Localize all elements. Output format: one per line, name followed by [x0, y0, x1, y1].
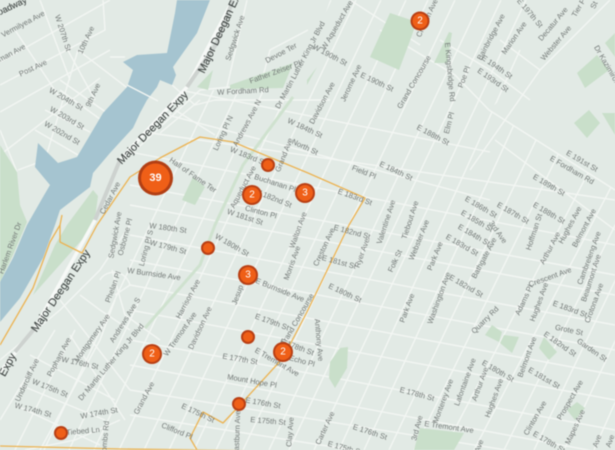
street labels: Sedgwick Ave: [223, 14, 247, 62]
street labels: W Burnside Ave: [127, 266, 181, 282]
street labels: Beaumont Ave: [579, 253, 603, 303]
marker: cluster 3 Burnside: [238, 265, 258, 285]
street labels: Arthur Ave: [538, 230, 562, 266]
street labels: E 177th St: [222, 351, 259, 367]
street labels: Carter Ave: [313, 410, 337, 446]
marker: cluster 3 Burnside: 3: [245, 270, 251, 280]
street labels: Dr Martin Luther King Jr Blvd: [273, 20, 327, 110]
marker: cluster 3 Walton: [295, 183, 315, 203]
street labels: Grote St: [554, 323, 585, 338]
street labels: Jerome Ave: [338, 63, 364, 103]
marker: cluster 3 Walton: 3: [302, 188, 308, 198]
street labels: E 176th St: [245, 395, 282, 411]
street labels: 3rd Ave: [409, 414, 425, 442]
street labels: Davidson Ave: [307, 80, 337, 126]
street labels: W 182nd St: [253, 186, 294, 210]
street labels: Sedgwick Ave: [106, 211, 124, 259]
street labels: E Kingsbridge Rd: [443, 42, 457, 102]
street labels: North St: [290, 137, 320, 157]
marker: single E 179th St: [241, 330, 255, 344]
street labels: E 185th St: [459, 208, 495, 234]
street labels: Washington Ave: [425, 271, 453, 325]
street labels: Marion Ave: [499, 20, 529, 56]
street labels: E 175th St: [180, 401, 217, 425]
street labels: Major Deegan Expy: [115, 89, 191, 167]
street labels: Harrison Ave: [174, 278, 202, 320]
street labels: W 174th St: [80, 405, 119, 421]
marker: single W 180th St: [201, 241, 215, 255]
street labels: Jesup Ave: [230, 270, 250, 306]
street labels: E 194th St: [480, 53, 515, 81]
street labels: Hughes Ave: [556, 205, 584, 245]
street labels: Anthony Ave: [313, 318, 325, 362]
street labels: E 191st St: [565, 148, 600, 174]
street labels: E 179th St: [254, 312, 291, 333]
street labels: Andrews Ave N: [231, 98, 263, 148]
street labels: Ryer Ave: [353, 237, 371, 269]
marker: cluster 2 top: [410, 12, 430, 30]
street labels: Buchanan Pl: [253, 172, 297, 194]
street labels: Poe Pl: [456, 65, 472, 89]
street labels: Park Ave: [398, 292, 416, 324]
street labels: Field Pl: [351, 163, 378, 181]
street labels: E Tremont Ave: [424, 419, 474, 435]
street labels: W 202nd St: [43, 119, 82, 147]
street labels: Valentine Ave: [375, 199, 397, 245]
street labels: E 186th St: [463, 194, 499, 220]
street labels: Phelan Pl: [103, 270, 123, 304]
street labels: W 204th St: [47, 86, 85, 113]
street labels: E 176th St: [352, 422, 389, 442]
street labels: E 183rd St: [444, 232, 481, 258]
street labels: Tiebed Ln: [66, 425, 100, 437]
street labels: W 180th St: [149, 221, 188, 235]
street labels: Hoffman St: [524, 212, 544, 251]
street labels: E 183rd St: [552, 299, 589, 320]
street labels: W 176th St: [61, 355, 100, 371]
street labels: Loring Pl S: [137, 229, 155, 267]
marker: cluster 2 Aqueduct: 2: [249, 190, 255, 200]
street labels: E 188th St: [531, 200, 567, 226]
street labels: Mount Hope Pl: [226, 372, 278, 390]
street labels: E 180th St: [327, 281, 364, 305]
street labels: W 181st St: [226, 207, 265, 227]
street labels: Webster Ave: [539, 24, 573, 62]
street labels: Clay Ave: [284, 417, 296, 447]
street labels: E 182nd St: [333, 223, 372, 241]
street labels: Prospect Ave: [555, 378, 585, 422]
street labels: E 178th St: [279, 337, 316, 358]
street labels: W 179th St: [149, 238, 188, 256]
street labels: W Tremont Ave: [161, 310, 199, 358]
marker: single E 176th St: [232, 397, 246, 411]
street labels: Quarry Rd: [469, 304, 501, 336]
street labels: E 184th St: [378, 159, 415, 183]
street labels: Clinton Pl: [244, 203, 278, 221]
street labels: E 181st St: [321, 253, 358, 271]
river: [0, 0, 210, 322]
street labels: Lafontaine Ave: [452, 357, 478, 407]
street labels: Father Zeiser Pl: [248, 58, 302, 85]
street labels: Elm Pl: [442, 111, 456, 135]
marker: cluster 39: [138, 160, 173, 196]
street labels: Belmont Ave: [570, 207, 598, 249]
street labels: Aqueduct Ave: [228, 164, 258, 210]
street labels: Webster Ave: [407, 218, 431, 262]
street labels: Major Deegan Expy: [29, 247, 93, 334]
expressway: Major Deegan: [0, 0, 233, 372]
street labels: Decatur Ave: [536, 5, 570, 43]
street labels: Adams Pl: [513, 283, 535, 317]
street labels: Grand Ave: [132, 380, 156, 416]
marker: single at Grand Ave: [261, 158, 275, 172]
street labels: E 189th St: [531, 172, 567, 198]
street labels: W 207th St: [53, 14, 73, 53]
marker: cluster 2 Grand Concourse: 2: [280, 346, 286, 358]
marker: cluster 2 Grand Concourse: [273, 342, 293, 362]
street labels: Clinton Ave: [522, 399, 548, 437]
street labels: Walton Ave: [287, 211, 309, 249]
marker: cluster 2 W Tremont: [142, 344, 162, 364]
street labels: E 193rd St: [476, 66, 511, 94]
street labels: Clifford Pl: [160, 421, 194, 441]
street labels: Bathgate Ave: [469, 236, 499, 280]
street labels: E 178th St: [399, 385, 436, 403]
street labels: Montgomery Ave: [72, 312, 112, 364]
street labels: Garden St: [575, 336, 609, 364]
street labels: E Burnside Ave: [254, 276, 306, 304]
street labels: W 180th St: [213, 232, 251, 259]
street labels: 3rd Ave: [487, 219, 509, 245]
street labels: Folk St: [386, 248, 404, 274]
street labels: E 180th St: [480, 358, 516, 384]
street labels: Crotona Ave: [583, 282, 605, 324]
street labels: Devoe Ter: [264, 41, 299, 65]
street labels: Echo Pl: [288, 353, 316, 369]
street labels: Grand Ave: [273, 137, 295, 173]
street labels: Ave: [591, 433, 603, 449]
street labels: Loring Pl N: [211, 114, 235, 152]
street labels: W 174th St: [14, 401, 53, 419]
street labels: Vermilyea Ave: [0, 9, 46, 39]
street labels: Osborne Pl: [116, 217, 134, 257]
street labels: Belmont Ave: [516, 335, 538, 379]
street labels: E Fordham Rd: [548, 154, 596, 186]
street labels: Bainbridge Ave: [475, 12, 507, 62]
street labels: Popham Ave: [45, 336, 73, 378]
street labels: W 175th St: [31, 377, 70, 400]
street labels: Cedar Ave: [98, 180, 122, 216]
street labels: Hall of Fame Ter: [168, 155, 219, 195]
bridge: [127, 85, 158, 101]
marker: cluster 39: 39: [149, 172, 162, 184]
street labels: Mapes Ave: [563, 408, 587, 446]
street labels: E 184th St: [456, 222, 492, 248]
street labels: Park Ave: [425, 240, 445, 272]
street labels: W Fordham Rd: [217, 85, 269, 97]
street labels: Undercliff Ave: [13, 357, 41, 403]
street labels: Hughes Ave: [483, 377, 505, 419]
street labels: Grand Concourse: [395, 54, 433, 110]
street labels: Post Ave: [18, 58, 48, 78]
street labels: Creston Ave: [311, 226, 337, 268]
street labels: E 181st St: [527, 365, 562, 391]
marker: cluster 2 W Tremont: 2: [149, 348, 155, 360]
transit lines: [0, 137, 365, 450]
street labels: Davidson Ave: [186, 305, 214, 351]
street labels: E 175th St: [250, 415, 287, 427]
street labels: Morris Ave: [282, 245, 302, 281]
street labels: E 183rd St: [337, 187, 374, 208]
street labels: W 183rd St: [229, 145, 268, 168]
street labels: 10th Ave: [76, 25, 96, 55]
street labels: W 190th St: [311, 42, 349, 68]
street labels: E 182nd St: [447, 273, 485, 300]
street labels: Dr Martin Luther King Jr Blvd: [76, 322, 146, 402]
street labels: Arthur Ave: [470, 366, 490, 402]
street labels: 9th Ave: [84, 82, 102, 108]
street labels: E 187th St: [495, 200, 531, 226]
street labels: Monterey Ave: [431, 378, 455, 424]
marker: cluster 2 Aqueduct: [242, 185, 262, 205]
street labels: W Aqueduct Ave: [319, 0, 355, 51]
street labels: St: [588, 0, 600, 10]
street labels: E 190th St: [359, 70, 396, 94]
street labels: W 203rd St: [48, 105, 86, 132]
street labels: Grand Concourse: [278, 292, 316, 348]
street labels: Crescent Ave: [527, 265, 573, 289]
street labels: Andrews Ave S: [108, 296, 142, 344]
street labels: Tiebout Ave: [400, 200, 420, 240]
marker: single bottom left: [54, 426, 68, 440]
street labels: E 188th St: [415, 123, 452, 148]
street labels: Hughes Ave: [528, 281, 550, 323]
marker: cluster 2 top: 2: [417, 16, 423, 26]
street labels: W 184th St: [286, 116, 325, 140]
street labels: E Tremont Ave: [253, 346, 301, 378]
street labels: E 182nd St: [542, 330, 579, 359]
street labels: Cambreleng Ave: [575, 230, 603, 286]
